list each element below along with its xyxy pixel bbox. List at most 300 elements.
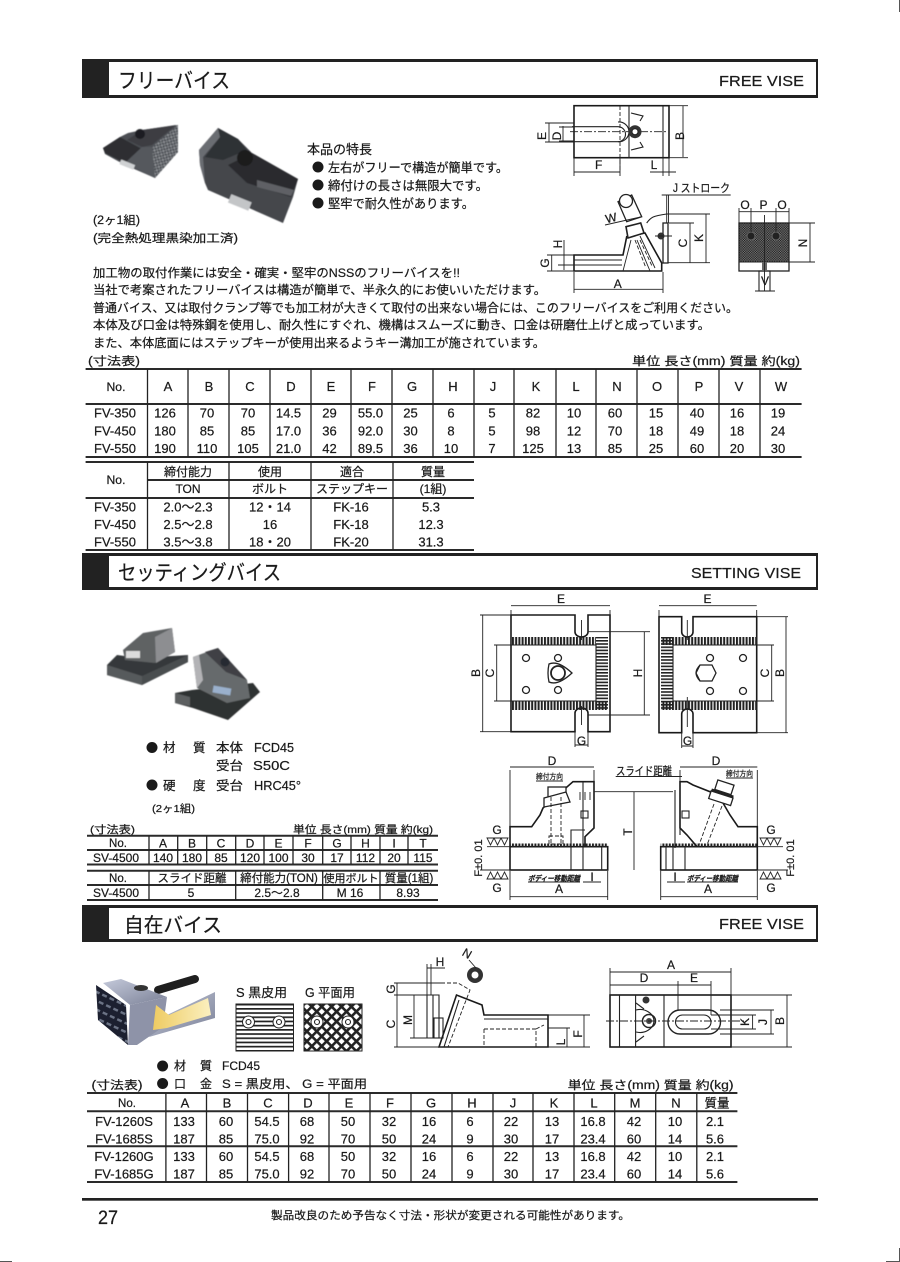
technical drawing: setting vise plan left: E	[557, 592, 565, 606]
dimension table: free vise: 5	[488, 406, 496, 420]
dimension table: setting vise	[87, 836, 438, 865]
dimension table: jizai vise: A	[181, 1096, 190, 1110]
capacity table: setting vise: 締付能力(TON)	[240, 871, 318, 885]
dimension table: setting vise: 20	[387, 851, 401, 865]
technical drawing: setting vise section right: G	[766, 881, 776, 895]
dimension table: free vise: 25	[403, 406, 418, 420]
capacity table: free vise: No.	[106, 473, 126, 487]
dimension table: setting vise: SV-4500	[93, 851, 139, 865]
dimension table: jizai vise: 92	[300, 1166, 314, 1182]
dimension table: free vise: F	[368, 379, 376, 394]
dimension table: setting vise: T	[419, 836, 427, 850]
dimension table: free vise: 15	[649, 406, 663, 420]
dimension table: setting vise: C	[217, 836, 226, 850]
text: product features: 堅牢で耐久性があります。	[328, 196, 474, 211]
text: product features: 左右がフリーで構造が簡単です。	[328, 160, 508, 175]
dimension table: jizai vise: G	[426, 1096, 436, 1110]
text: jizai vise material and jaws: 口	[174, 1077, 186, 1091]
dimension table: jizai vise: 5.6	[706, 1132, 724, 1146]
dimension table: free vise: 36	[403, 441, 418, 456]
capacity table: setting vise: M 16	[337, 886, 364, 900]
capacity table: setting vise: 8.93	[396, 886, 420, 900]
heading: free vise: FREE VISE	[719, 73, 804, 90]
dimension table: jizai vise: J	[510, 1096, 516, 1110]
technical drawing: jizai vise side view: H	[436, 955, 444, 969]
dimension table: setting vise: H	[361, 836, 370, 850]
dimension table: jizai vise: 16.8	[580, 1114, 606, 1129]
jaw type: G flat surface	[304, 986, 362, 1051]
label: slide distance and dimension T: T	[621, 828, 635, 836]
technical drawing: jizai vise side view: N	[460, 945, 474, 962]
dimension table: jizai vise: K	[550, 1096, 559, 1110]
dimension table: free vise: 70	[608, 424, 622, 438]
technical drawing: free vise side view	[538, 182, 731, 293]
text: setting vise material: 受台	[216, 778, 243, 793]
dimension table: jizai vise: 22	[504, 1114, 518, 1129]
technical drawing: free vise front view: O	[740, 198, 750, 212]
dimension table: jizai vise: 70	[341, 1132, 355, 1146]
technical drawing: setting vise section left	[473, 754, 608, 900]
capacity table: free vise: FK-18	[333, 517, 369, 532]
technical drawing: free vise plan view	[535, 106, 688, 176]
dimension table: jizai vise: 22	[504, 1149, 518, 1164]
panel: universal free vise section	[82, 905, 818, 1182]
dimension table: free vise: 29	[322, 406, 337, 420]
text: description paragraph: 普通バイス、又は取付クランプ等でも加工材が大きくて取付の出来ない場合には、このフリーバイスをご利用ください。	[93, 300, 738, 315]
text: jizai vise material and jaws: S = 黒皮用、 G = 平面用	[222, 1077, 367, 1091]
dimension table: jizai vise: 85	[219, 1166, 233, 1182]
technical drawing: free vise side view: W	[604, 210, 619, 226]
dimension table: free vise: 60	[608, 406, 622, 420]
capacity table: free vise: FK-20	[333, 534, 369, 550]
dimension table: jizai vise: 30	[504, 1132, 518, 1146]
dimension table: jizai vise: 42	[627, 1114, 641, 1129]
dimension table: free vise: O	[652, 379, 662, 394]
text: setting vise material: 本体	[216, 741, 244, 755]
dimension table: jizai vise: 16	[422, 1149, 436, 1164]
technical drawing: free vise plan view: D	[550, 131, 564, 140]
label: slide distance and dimension T	[594, 764, 682, 870]
dimension table: setting vise: 140	[153, 851, 173, 865]
dimension table: jizai vise: 133	[173, 1149, 195, 1164]
text: description paragraph	[93, 265, 738, 350]
dimension table: free vise: FV-350	[94, 406, 136, 420]
technical drawing: setting vise plan right	[659, 592, 788, 748]
technical drawing: setting vise plan left: B	[469, 669, 483, 677]
dimension table: free vise: 13	[567, 441, 581, 456]
dimension table: jizai vise: L	[590, 1096, 598, 1110]
heading: jizai vise: FREE VISE	[719, 916, 804, 933]
capacity table: free vise: 12・14	[249, 500, 291, 514]
dimension table: jizai vise: 24	[422, 1166, 436, 1182]
dimension table: jizai vise: 23.4	[580, 1166, 606, 1182]
capacity table: free vise: 3.5～3.8	[163, 534, 213, 550]
technical drawing: free vise side view: G	[538, 258, 552, 268]
dimension table: jizai vise: 24	[422, 1132, 436, 1146]
text: set note: (2ヶ1組)	[152, 802, 195, 815]
dimension table: setting vise: D	[246, 836, 255, 850]
dimension table: jizai vise: 9	[466, 1166, 474, 1182]
technical drawing: setting vise plan left: H	[631, 669, 645, 677]
text: jizai vise material and jaws	[157, 1058, 367, 1091]
dimension table: jizai vise: 70	[341, 1166, 355, 1182]
dimension table: jizai vise: M	[630, 1096, 640, 1110]
dimension table: free vise: 8	[447, 424, 455, 438]
dimension table: jizai vise: 6	[466, 1114, 474, 1129]
dimension table: setting vise: 115	[413, 851, 433, 865]
dimension table: jizai vise: 75.0	[254, 1132, 280, 1146]
dimension table: jizai vise: 14	[668, 1166, 682, 1182]
dimension table: jizai vise: 42	[627, 1149, 641, 1164]
dimension table: free vise: 30	[403, 424, 418, 438]
technical drawing: free vise side view: A	[614, 277, 622, 291]
dimension table: free vise: 36	[322, 424, 337, 438]
text: setting vise material: 硬	[163, 779, 176, 793]
table caption and units	[90, 823, 433, 836]
capacity table: free vise: 16	[263, 517, 277, 532]
dimension table: jizai vise: 13	[545, 1149, 559, 1164]
text: jizai vise material and jaws: 質	[200, 1058, 212, 1073]
technical drawing: free vise plan view: F	[595, 158, 602, 172]
text: description paragraph: 当社で考案されたフリーバイスは構造が簡単で、半永久的にお使いいただけます。	[93, 282, 546, 297]
dimension table: free vise: J	[490, 379, 496, 394]
dimension table: jizai vise: 10	[668, 1114, 682, 1129]
capacity table: free vise: 31.3	[418, 534, 444, 550]
dimension table: free vise: 180	[154, 424, 176, 438]
jaw type: S black skin	[236, 986, 294, 1051]
text: setting vise material: 度	[193, 778, 206, 793]
technical drawing: jizai vise side view: F	[571, 1030, 585, 1038]
dimension table: setting vise: 30	[301, 851, 315, 865]
capacity table: free vise: TON	[175, 482, 201, 496]
text: setting vise material: S50C	[253, 759, 290, 773]
dimension table: jizai vise: 60	[627, 1132, 641, 1146]
dimension table: jizai vise: 187	[173, 1166, 195, 1182]
dimension table: jizai vise: 133	[173, 1114, 195, 1129]
technical drawing: jizai vise side view: G	[384, 984, 398, 994]
table caption and units	[92, 1078, 734, 1092]
dimension table: free vise: 10	[567, 406, 581, 420]
dimension table: jizai vise: 9	[466, 1132, 474, 1146]
technical drawing: setting vise section right	[661, 754, 797, 900]
dimension table: jizai vise: 14	[668, 1132, 682, 1146]
dimension table: free vise: 5	[488, 424, 496, 438]
dimension table: jizai vise: FV-1685G	[94, 1166, 154, 1182]
dimension table: free vise: FV-450	[94, 424, 136, 438]
capacity table: free vise: ステップキー	[316, 482, 388, 496]
technical drawing: setting vise section right: I	[673, 870, 677, 884]
capacity table: setting vise: No.	[109, 871, 127, 885]
technical drawing: free vise front view: P	[759, 198, 768, 212]
text: product features: 締付けの長さは無限大です。	[328, 178, 488, 193]
dimension table: free vise: K	[532, 379, 541, 394]
dimension table: free vise: 30	[771, 441, 785, 456]
text: description paragraph: 加工物の取付作業には安全・確実・堅牢のNSSのフリーバイスを!!	[93, 265, 460, 280]
dimension table: free vise: 85	[241, 424, 255, 438]
dimension table: jizai vise: 6	[466, 1149, 474, 1164]
dimension table: free vise: D	[286, 379, 296, 394]
heading: jizai vise: 自在バイス	[124, 914, 222, 937]
dimension table: free vise: 85	[608, 441, 622, 456]
table caption and units: 単位 長さ(mm) 質量 約(kg)	[632, 354, 800, 368]
dimension table: free vise: 20	[730, 441, 744, 456]
text: setting vise material: 材	[163, 741, 176, 755]
dimension table: free vise: 190	[154, 441, 176, 456]
dimension table: jizai vise: 32	[382, 1149, 396, 1164]
dimension table: jizai vise: 54.5	[254, 1114, 280, 1129]
capacity table: free vise: 5.3	[422, 500, 440, 514]
dimension table: free vise: 82	[526, 406, 540, 420]
dimension table: jizai vise: E	[345, 1096, 354, 1110]
dimension table: jizai vise: 2.1	[706, 1149, 724, 1164]
dimension table: free vise: 16	[730, 406, 744, 420]
technical drawing: setting vise section left: A	[555, 882, 563, 896]
table caption and units: (寸法表)	[90, 823, 135, 836]
capacity table: free vise	[86, 462, 474, 550]
dimension table: free vise: 98	[526, 424, 540, 438]
dimension table: free vise: 110	[197, 441, 217, 456]
footer note: 製品改良のため予告なく寸法・形状が変更される可能性があります。	[271, 1208, 630, 1222]
dimension table: jizai vise: 50	[341, 1149, 355, 1164]
dimension table: free vise: No.	[106, 380, 126, 394]
dimension table: free vise: 19	[771, 406, 785, 420]
dimension table: free vise: 7	[488, 441, 496, 456]
dimension table: free vise	[86, 369, 802, 457]
dimension table: jizai vise: 85	[219, 1132, 233, 1146]
technical drawing: setting vise section right: ボディー移動距離	[687, 874, 739, 883]
technical drawing: jizai vise plan view: K	[738, 1018, 752, 1026]
dimension table: jizai vise: D	[303, 1096, 313, 1110]
text: product features	[307, 142, 508, 211]
technical drawing: free vise front view	[739, 198, 815, 291]
technical drawing: setting vise section left: D	[548, 754, 557, 768]
dimension table: jizai vise: F	[386, 1096, 394, 1110]
dimension table: jizai vise: B	[223, 1096, 231, 1110]
technical drawing: free vise side view: H	[551, 240, 565, 248]
capacity table: free vise: ボルト	[252, 482, 288, 496]
dimension table: free vise: 18	[730, 424, 744, 438]
capacity table: free vise: 締付能力	[164, 465, 212, 479]
text: description paragraph: また、本体底面にはステップキーが使用出来るようキー溝加工が施されています。	[93, 335, 545, 350]
capacity table: setting vise: SV-4500	[93, 886, 139, 900]
dimension table: setting vise: E	[274, 836, 283, 850]
heading: setting vise	[82, 553, 818, 590]
technical drawing: setting vise plan right: C	[758, 668, 772, 677]
dimension table: jizai vise: 23.4	[580, 1132, 606, 1146]
technical drawing: jizai vise side view: L	[554, 1038, 568, 1045]
technical drawing: free vise front view: O	[777, 198, 787, 212]
technical drawing: jizai vise plan view: A	[667, 958, 675, 972]
dimension table: jizai vise: C	[263, 1096, 273, 1110]
technical drawing: setting vise plan right: E	[703, 592, 712, 606]
heading: setting vise: SETTING VISE	[691, 565, 801, 582]
dimension table: jizai vise: 54.5	[254, 1149, 280, 1164]
technical drawing: jizai vise plan view: E	[690, 971, 698, 985]
capacity table: setting vise: 使用ボルト	[324, 872, 378, 885]
dimension table: free vise: 89.5	[358, 441, 383, 456]
panel: setting vise section	[82, 553, 818, 900]
text: description paragraph: 本体及び口金は特殊鋼を使用し、耐久性にすぐれ、機構はスムーズに動き、口金は研磨仕上げと成っています。	[93, 317, 710, 332]
technical drawing: setting vise section left: G	[492, 823, 502, 837]
heading: jizai vise	[82, 905, 818, 942]
dimension table: setting vise: No.	[109, 836, 127, 850]
dimension table: jizai vise: FV-1685S	[95, 1132, 153, 1146]
dimension table: jizai vise: 30	[504, 1166, 518, 1182]
capacity table: setting vise: 2.5～2.8	[254, 886, 300, 900]
product illustration: cutaway vise	[96, 979, 215, 1045]
capacity table: free vise: 使用	[258, 464, 282, 479]
dimension table: free vise: 49	[690, 424, 704, 438]
technical drawing: setting vise section left: ボディー移動距離	[528, 874, 581, 883]
technical drawing: jizai vise plan view: J	[756, 1019, 770, 1025]
capacity table: free vise: 18・20	[249, 534, 291, 550]
jaw type: S black skin: S 黒皮用	[236, 986, 287, 1000]
dimension table: jizai vise: 2.1	[706, 1114, 724, 1129]
technical drawing: free vise side view: J ストローク	[673, 182, 730, 195]
dimension table: free vise: N	[612, 379, 622, 394]
technical drawing: free vise plan view: L	[651, 158, 658, 172]
technical drawing: setting vise section right: A	[704, 882, 712, 896]
table caption and units: (寸法表)	[92, 1078, 143, 1092]
dimension table: jizai vise: 32	[382, 1114, 396, 1129]
dimension table: jizai vise: 68	[300, 1149, 314, 1164]
dimension table: setting vise: F	[304, 836, 312, 850]
dimension table: jizai vise: H	[467, 1096, 477, 1110]
dimension table: setting vise: 120	[240, 851, 260, 865]
dimension table: jizai vise: 60	[219, 1149, 233, 1164]
panel: free vise section	[82, 59, 818, 550]
technical drawing: jizai vise side view: C	[384, 1019, 398, 1028]
capacity table: free vise: FK-16	[333, 500, 369, 514]
dimension table: free vise: 105	[237, 441, 259, 456]
dimension table: jizai vise: 16	[422, 1114, 436, 1129]
dimension table: jizai vise: FV-1260G	[94, 1149, 154, 1164]
dimension table: setting vise: B	[188, 836, 196, 850]
dimension table: jizai vise: No.	[118, 1096, 136, 1110]
dimension table: free vise: 17.0	[276, 424, 301, 438]
text: set note	[93, 214, 238, 245]
capacity table: free vise: 12.3	[418, 517, 444, 532]
technical drawing: setting vise plan right: G	[683, 734, 692, 748]
dimension table: jizai vise: 50	[341, 1114, 355, 1129]
dimension table: free vise: 40	[690, 406, 704, 420]
dimension table: jizai vise: 60	[627, 1166, 641, 1182]
technical drawing: free vise side view: C	[676, 238, 690, 247]
text: jizai vise material and jaws: 材	[174, 1059, 186, 1073]
dimension table: jizai vise: 50	[382, 1132, 396, 1146]
capacity table: setting vise: 5	[188, 886, 195, 900]
dimension table: jizai vise: 50	[382, 1166, 396, 1182]
technical drawing: setting vise section right: F±0. 01	[785, 839, 797, 877]
capacity table: free vise: FV-350	[94, 500, 136, 514]
dimension table: free vise: 12	[567, 424, 581, 438]
technical drawing: free vise side view: K	[692, 234, 706, 242]
text: setting vise material	[146, 740, 301, 793]
dimension table: jizai vise: 92	[300, 1132, 314, 1146]
dimension table: free vise: P	[695, 379, 703, 394]
dimension table: jizai vise: 質量	[704, 1096, 730, 1110]
label: slide distance and dimension T: スライド距離	[616, 764, 672, 778]
technical drawing: setting vise section right: 締付方向	[726, 768, 753, 778]
dimension table: free vise: E	[327, 379, 336, 394]
text: setting vise material: 質	[193, 740, 206, 755]
technical drawing: free vise front view: N	[796, 239, 810, 247]
technical drawing: setting vise section right: D	[712, 754, 721, 768]
jaw type: G flat surface: G 平面用	[305, 986, 355, 1000]
technical drawing: setting vise plan left: G	[577, 734, 586, 748]
dimension table: setting vise: 85	[214, 851, 228, 865]
text: setting vise material: FCD45	[254, 741, 294, 755]
dimension table: free vise: G	[407, 379, 417, 394]
dimension table: jizai vise: FV-1260S	[95, 1114, 153, 1129]
technical drawing: jizai vise plan view	[606, 958, 792, 1047]
capacity table: free vise: 2.0～2.3	[163, 500, 213, 514]
technical drawing: setting vise section left: 締付方向	[536, 771, 563, 781]
capacity table: free vise: (1組)	[420, 482, 446, 496]
technical drawing: setting vise section left: G	[492, 881, 502, 895]
dimension table: free vise: L	[572, 379, 580, 394]
dimension table: free vise: 125	[522, 441, 544, 456]
dimension table: jizai vise: 17	[545, 1132, 559, 1146]
capacity table: free vise: 適合	[340, 465, 364, 479]
dimension table: jizai vise	[87, 1093, 737, 1182]
technical drawing: setting vise section left: F±0. 01	[473, 839, 485, 877]
dimension table: free vise: 42	[322, 441, 337, 456]
capacity table: setting vise: スライド距離	[158, 871, 227, 885]
technical drawing: jizai vise side view: M	[401, 1015, 415, 1025]
dimension table: setting vise: A	[159, 836, 167, 850]
dimension table: free vise: A	[164, 379, 173, 394]
dimension table: setting vise: G	[332, 836, 342, 850]
dimension table: free vise: 92.0	[358, 424, 383, 438]
dimension table: setting vise: 180	[182, 851, 202, 865]
technical drawing: free vise plan view: E	[535, 132, 549, 140]
dimension table: free vise: FV-550	[94, 441, 136, 456]
dimension table: setting vise: I	[392, 836, 396, 850]
capacity table: setting vise: 質量(1組)	[385, 871, 433, 885]
technical drawing: setting vise plan left	[469, 592, 650, 748]
dimension table: free vise: W	[775, 379, 788, 394]
dimension table: free vise: B	[205, 379, 213, 394]
dimension table: free vise: 60	[690, 441, 704, 456]
dimension table: setting vise: 17	[330, 851, 344, 865]
dimension table: free vise: 10	[444, 441, 458, 456]
technical drawing: setting vise plan right: B	[773, 669, 787, 677]
table caption and units	[88, 354, 800, 368]
technical drawing: free vise plan view: B	[673, 132, 687, 140]
dimension table: free vise: 21.0	[276, 441, 301, 456]
dimension table: free vise: H	[448, 379, 458, 394]
capacity table: setting vise	[87, 871, 438, 900]
dimension table: setting vise: 100	[268, 851, 289, 865]
dimension table: jizai vise: 13	[545, 1114, 559, 1129]
dimension table: jizai vise: 16.8	[580, 1149, 606, 1164]
text: setting vise material: 受台	[216, 758, 243, 773]
dimension table: jizai vise: 75.0	[254, 1166, 280, 1182]
technical drawing: setting vise section right: G	[766, 823, 776, 837]
capacity table: free vise: 2.5～2.8	[163, 517, 213, 532]
dimension table: free vise: 25	[649, 441, 663, 456]
table caption and units: 単位 長さ(mm) 質量 約(kg)	[568, 1078, 734, 1092]
dimension table: free vise: 70	[241, 406, 255, 420]
dimension table: jizai vise: 187	[173, 1132, 195, 1146]
dimension table: free vise: 126	[154, 406, 176, 420]
capacity table: free vise: FV-550	[94, 534, 136, 550]
dimension table: jizai vise: N	[671, 1096, 681, 1110]
dimension table: jizai vise: 68	[300, 1114, 314, 1129]
heading: free vise	[82, 59, 818, 98]
dimension table: free vise: 18	[649, 424, 663, 438]
